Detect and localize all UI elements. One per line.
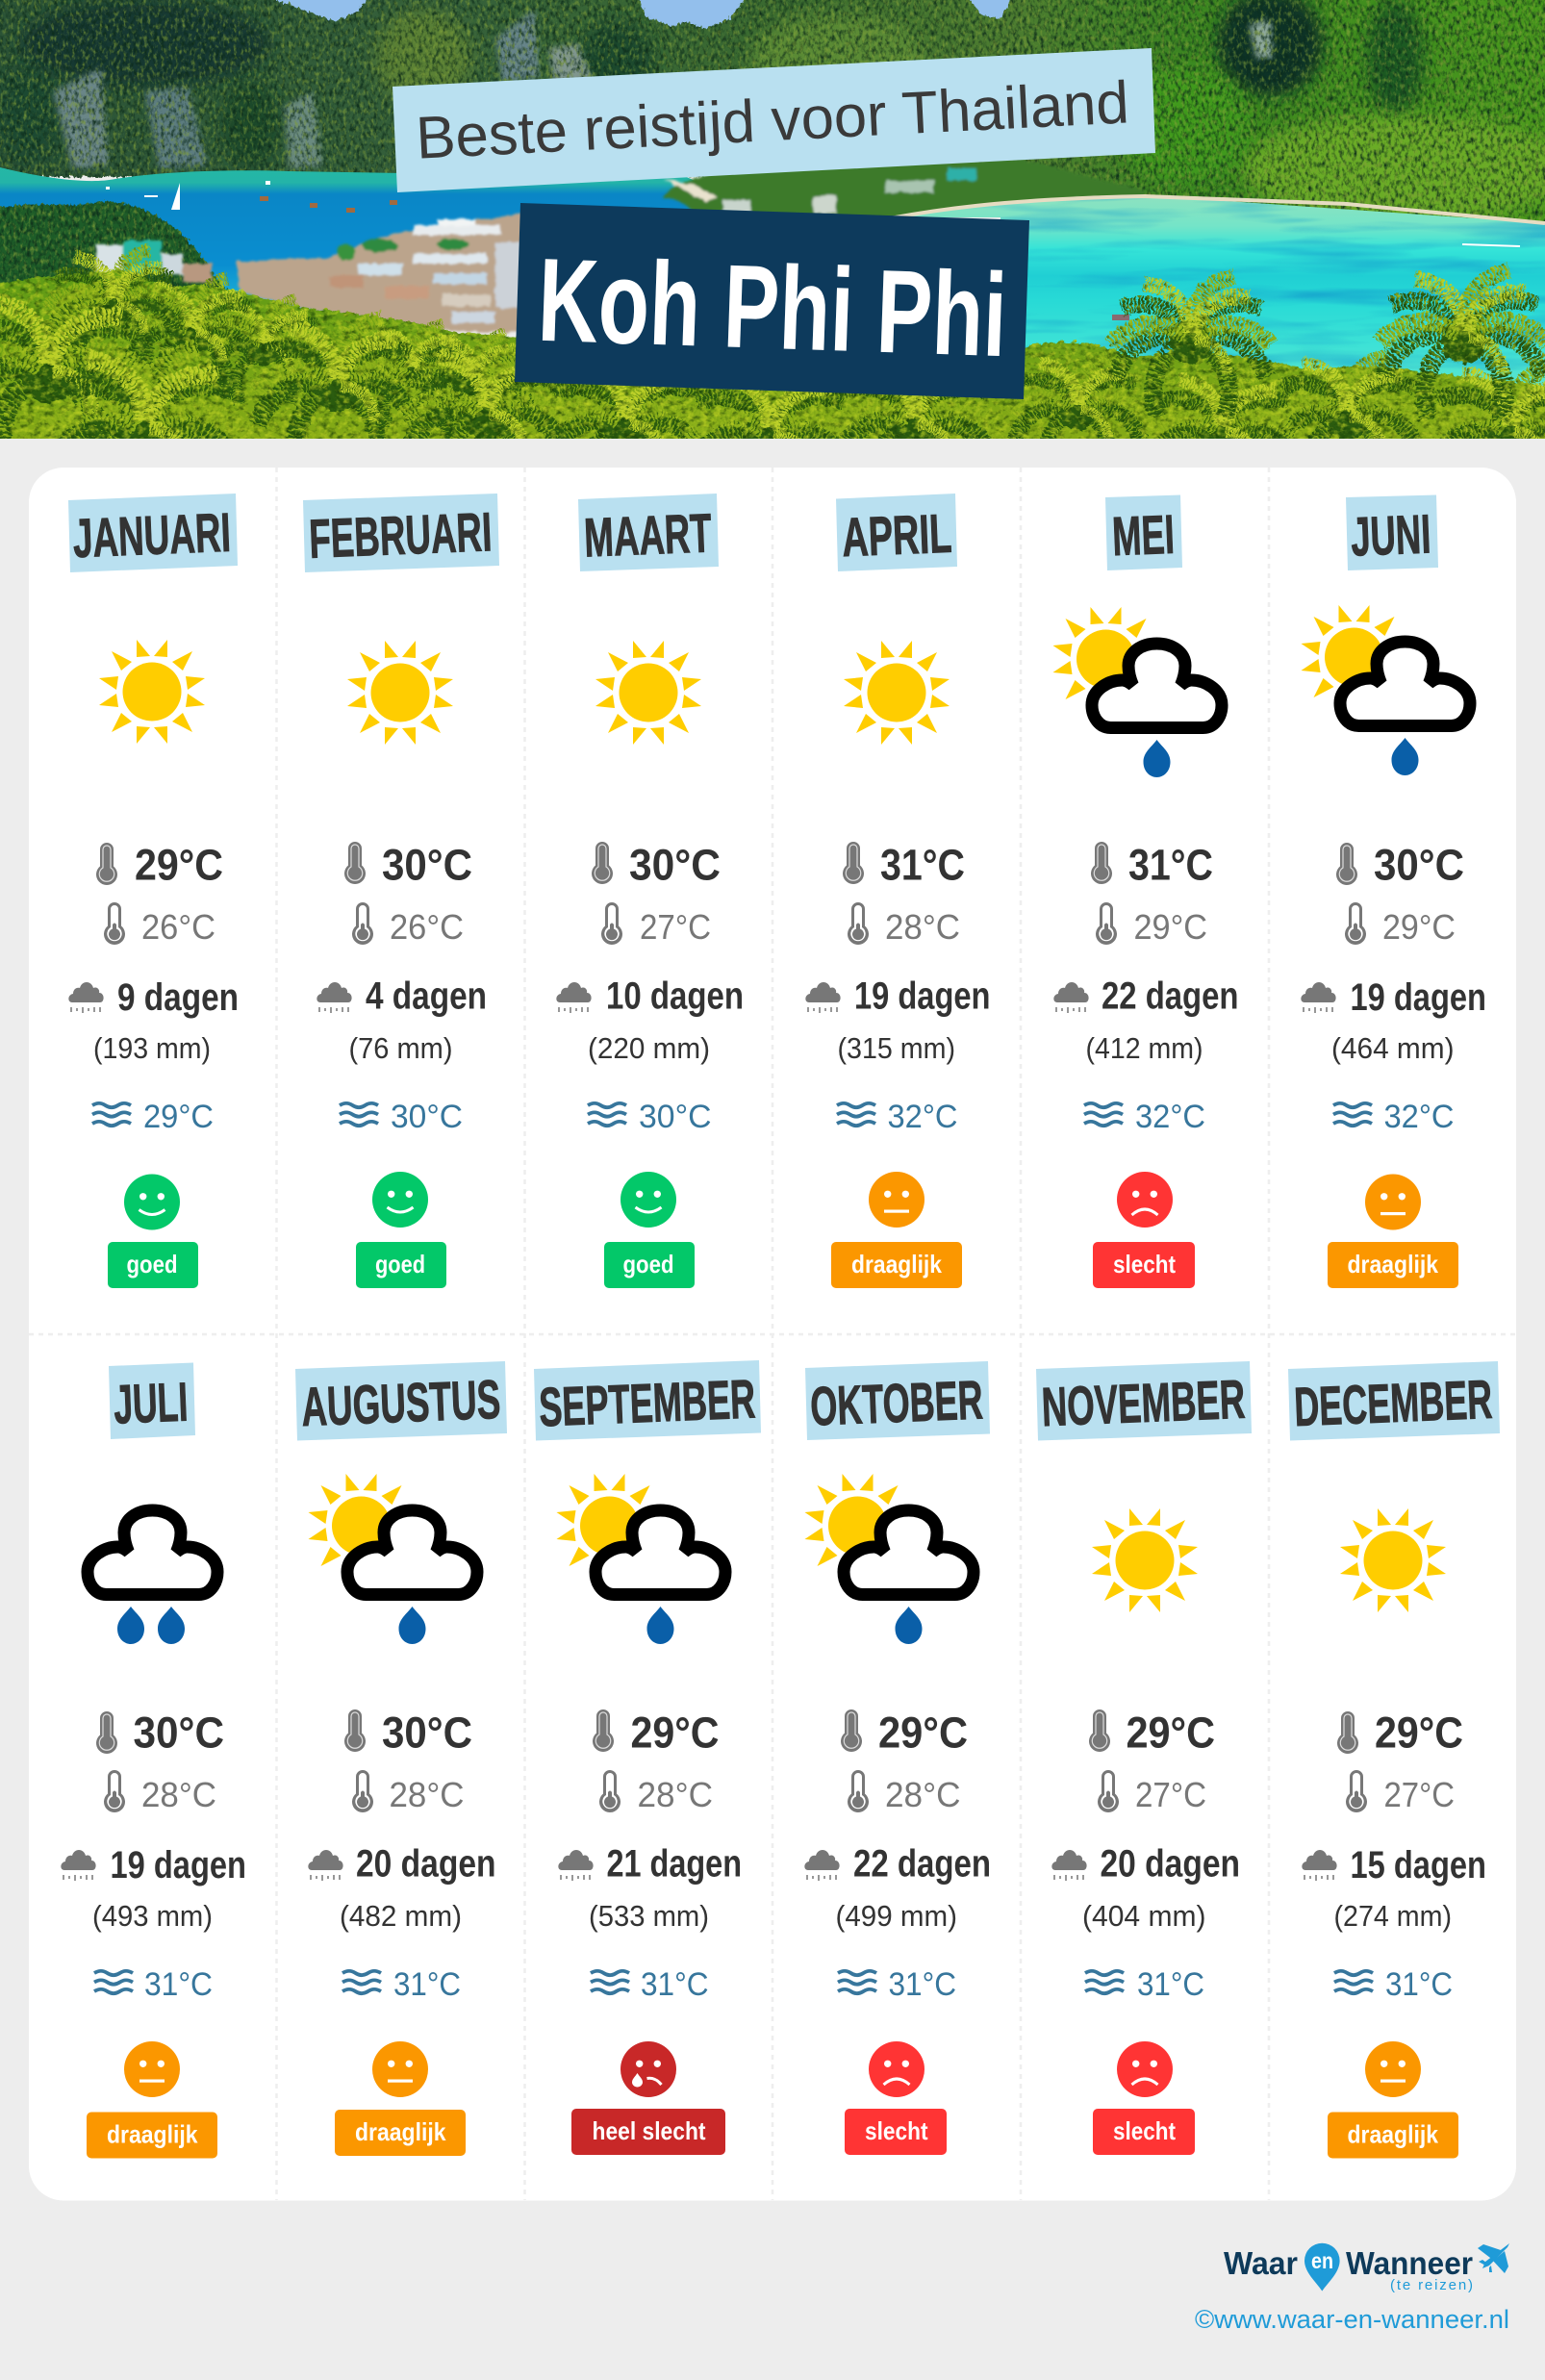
rating badge	[356, 1242, 446, 1288]
rain days: 22 dagen	[1102, 975, 1239, 1018]
icon: airplane	[1478, 2243, 1509, 2273]
rating face	[1117, 1172, 1173, 1228]
rating badge: goed	[375, 1250, 425, 1279]
rainfall: (315 mm)	[837, 1031, 955, 1065]
rainfall: (412 mm)	[1085, 1031, 1203, 1065]
max temperature	[841, 1709, 968, 1757]
hero photo: Koh Phi Phi bay	[0, 0, 1545, 439]
month label: JULI	[113, 1372, 189, 1436]
month label	[1346, 494, 1438, 570]
max temperature: 30°C	[382, 841, 472, 889]
sea temperature	[92, 1099, 214, 1135]
banner: Beste reistijd voor Thailand	[393, 48, 1155, 192]
min temperature: 28°C	[141, 1775, 216, 1814]
title: Koh Phi Phi	[515, 203, 1029, 399]
icon: sun behind cloud with one drop	[556, 1474, 725, 1644]
month label: NOVEMBER	[1041, 1369, 1246, 1438]
month: juli	[61, 1362, 246, 2159]
rain days: 19 dagen	[110, 1844, 246, 1886]
max temperature	[843, 841, 965, 889]
month: juni	[1301, 494, 1486, 1288]
rating badge	[87, 2113, 217, 2159]
sea temperature	[838, 1966, 956, 2003]
min temperature: 27°C	[1135, 1775, 1206, 1814]
rating face	[1117, 2041, 1173, 2097]
rain days	[1302, 1844, 1486, 1886]
sea temperature: 31°C	[641, 1966, 708, 2003]
month: maart	[556, 494, 744, 1288]
max temperature	[1336, 841, 1464, 889]
rainfall: (533 mm)	[589, 1899, 709, 1933]
rating badge	[108, 1242, 198, 1288]
rain days	[558, 1843, 742, 1886]
rating face	[1365, 2041, 1421, 2097]
min temperature	[1098, 1770, 1206, 1814]
rainfall: (220 mm)	[588, 1031, 710, 1065]
max temperature: 29°C	[631, 1709, 720, 1757]
sea temperature	[342, 1966, 461, 2003]
rain days: 21 dagen	[606, 1843, 742, 1886]
month: februari	[303, 494, 499, 1288]
month: november	[1036, 1361, 1252, 2155]
month label: FEBRUARI	[308, 501, 493, 570]
max temperature	[344, 841, 472, 889]
rating badge	[1328, 2113, 1458, 2159]
sea temperature: 31°C	[393, 1966, 461, 2003]
icon: sun behind cloud with one drop	[1301, 605, 1470, 775]
rain days	[317, 975, 487, 1018]
sea temperature: 31°C	[1137, 1966, 1204, 2003]
rating badge	[335, 2110, 466, 2156]
icon: sun behind cloud with one drop	[1052, 607, 1222, 777]
rating badge	[604, 1242, 695, 1288]
max temperature	[1089, 1709, 1215, 1757]
rating badge	[845, 2109, 947, 2155]
rating face	[869, 1172, 924, 1228]
sea temperature: 31°C	[1385, 1966, 1453, 2003]
month: mei	[1052, 494, 1239, 1288]
rain days: 4 dagen	[366, 975, 487, 1018]
icon: map pin	[1304, 2243, 1340, 2291]
logo: Waar en Wanneer: Waar	[1224, 2245, 1298, 2281]
month label	[578, 494, 719, 571]
icon: sun	[347, 641, 453, 745]
max temperature: 30°C	[133, 1709, 224, 1757]
min temperature: 27°C	[640, 907, 711, 947]
min temperature	[848, 902, 960, 947]
max temperature	[593, 1709, 720, 1757]
max temperature	[1091, 841, 1213, 889]
month: december	[1288, 1361, 1500, 2159]
logo: Waar en Wanneer: Wanneer	[1346, 2245, 1473, 2281]
rating face	[124, 2041, 180, 2097]
min temperature	[601, 902, 711, 947]
title: Koh Phi Phi: Koh Phi Phi	[536, 235, 1009, 382]
icon: sun behind cloud with one drop	[804, 1474, 974, 1644]
icon: sun	[1340, 1508, 1446, 1612]
rain days	[1301, 976, 1486, 1019]
panel: months card	[29, 468, 1516, 2201]
month label: OKTOBER	[809, 1369, 984, 1438]
rating face	[124, 1174, 180, 1229]
sea temperature: 31°C	[889, 1966, 956, 2003]
rating badge	[1093, 2109, 1195, 2155]
max temperature: 31°C	[1128, 841, 1213, 889]
rainfall: (193 mm)	[93, 1031, 211, 1065]
max temperature	[344, 1709, 472, 1757]
month label	[1036, 1361, 1252, 1441]
month label	[836, 494, 957, 571]
icon: sun	[595, 641, 701, 745]
max temperature: 29°C	[1126, 1709, 1215, 1757]
rating badge	[1328, 1242, 1458, 1288]
max temperature	[96, 841, 223, 889]
min temperature	[352, 902, 464, 947]
month label: MEI	[1111, 504, 1176, 568]
min temperature: 28°C	[637, 1775, 713, 1814]
min temperature: 29°C	[1133, 907, 1207, 947]
sea temperature	[588, 1099, 712, 1135]
min temperature	[848, 1770, 960, 1814]
rain days: 20 dagen	[356, 1843, 496, 1886]
month label	[295, 1361, 507, 1441]
sea temperature	[1085, 1966, 1204, 2003]
rain days: 22 dagen	[853, 1843, 991, 1886]
min temperature	[1345, 902, 1456, 947]
max temperature: 29°C	[1375, 1709, 1463, 1757]
icon: sun	[844, 641, 950, 745]
max temperature: 29°C	[878, 1709, 968, 1757]
rain days	[805, 975, 991, 1018]
sea temperature	[94, 1966, 213, 2003]
rainfall: (493 mm)	[92, 1899, 213, 1933]
rain days	[68, 976, 239, 1019]
month label: AUGUSTUS	[300, 1369, 501, 1438]
month label: JANUARI	[72, 502, 232, 570]
month label	[303, 494, 499, 572]
rain days: 19 dagen	[854, 975, 991, 1018]
sea temperature: 32°C	[887, 1099, 958, 1135]
rating badge: slecht	[865, 2116, 928, 2145]
month: oktober	[804, 1361, 991, 2155]
sea temperature	[1333, 1099, 1455, 1135]
min temperature	[104, 902, 215, 947]
icon: cloud with two drops	[88, 1510, 217, 1644]
min temperature: 26°C	[141, 907, 215, 947]
max temperature	[592, 841, 721, 889]
rainfall: (499 mm)	[835, 1899, 957, 1933]
sea temperature: 32°C	[1383, 1099, 1455, 1135]
min temperature: 29°C	[1382, 907, 1456, 947]
logo: Waar en Wanneer: (te reizen)	[1390, 2277, 1473, 2293]
rain days	[1053, 975, 1239, 1018]
rain days	[556, 975, 744, 1018]
icon: sun behind cloud with one drop	[308, 1474, 477, 1644]
rating badge: slecht	[1113, 2116, 1176, 2145]
rating badge: draaglijk	[1347, 2120, 1438, 2149]
rating badge: goed	[127, 1250, 177, 1279]
rating badge: goed	[623, 1250, 673, 1279]
min temperature: 28°C	[389, 1775, 464, 1814]
rating badge: heel slecht	[593, 2116, 706, 2145]
rating badge: draaglijk	[355, 2117, 446, 2146]
rating badge: draaglijk	[1347, 1250, 1438, 1279]
min temperature: 27°C	[1383, 1775, 1455, 1814]
min temperature: 28°C	[885, 907, 960, 947]
month: januari	[68, 494, 239, 1288]
icon: map pin: en	[1311, 2248, 1333, 2273]
sea temperature: 29°C	[143, 1099, 214, 1135]
sea temperature	[591, 1966, 708, 2003]
rating badge: draaglijk	[851, 1250, 942, 1279]
sea temperature: 30°C	[391, 1099, 463, 1135]
min temperature	[1346, 1770, 1455, 1814]
rain days: 10 dagen	[606, 975, 744, 1018]
logo: Waar en Wanneer	[1224, 2243, 1509, 2293]
month label: APRIL	[841, 503, 952, 569]
max temperature: 30°C	[382, 1709, 472, 1757]
month label: SEPTEMBER	[538, 1369, 756, 1438]
rain days	[61, 1844, 246, 1886]
month label: JUNI	[1350, 503, 1431, 569]
min temperature	[352, 1770, 464, 1814]
rating face	[372, 2041, 428, 2097]
icon: sun	[99, 640, 205, 744]
month label	[805, 1361, 990, 1440]
rainfall: (404 mm)	[1082, 1899, 1206, 1933]
rating face	[621, 1172, 676, 1228]
month: april	[805, 494, 991, 1288]
month label	[534, 1360, 761, 1441]
month label	[68, 494, 238, 572]
rain days: 19 dagen	[1351, 976, 1486, 1019]
sea temperature: 30°C	[639, 1099, 712, 1135]
min temperature: 28°C	[885, 1775, 960, 1814]
sea temperature	[340, 1099, 463, 1135]
month: augustus	[295, 1361, 507, 2156]
rainfall: (274 mm)	[1333, 1899, 1452, 1933]
min temperature	[1096, 902, 1207, 947]
rating face	[621, 2041, 676, 2097]
icon: sun	[1092, 1508, 1198, 1612]
max temperature: 30°C	[629, 841, 721, 889]
rating face	[1365, 1174, 1421, 1229]
sea temperature	[1334, 1966, 1453, 2003]
month label	[1105, 494, 1182, 570]
rating badge	[571, 2109, 725, 2155]
rating face	[372, 1172, 428, 1228]
min temperature	[599, 1770, 713, 1814]
rain days	[308, 1843, 496, 1886]
rainfall: (464 mm)	[1331, 1031, 1455, 1065]
max temperature: 31°C	[880, 841, 965, 889]
rain days: 20 dagen	[1101, 1843, 1240, 1886]
rain days: 15 dagen	[1351, 1844, 1486, 1886]
max temperature: 30°C	[1374, 841, 1464, 889]
rain days: 9 dagen	[117, 976, 239, 1019]
rainfall: (76 mm)	[348, 1031, 452, 1065]
rating badge: slecht	[1113, 1250, 1176, 1279]
website credit: ©www.waar-en-wanneer.nl	[1195, 2305, 1509, 2334]
sea temperature	[1084, 1099, 1205, 1135]
sea temperature: 31°C	[144, 1966, 213, 2003]
rating badge	[831, 1242, 962, 1288]
min temperature	[104, 1770, 216, 1814]
rating face	[869, 2041, 924, 2097]
rainfall: (482 mm)	[340, 1899, 462, 1933]
min temperature: 26°C	[390, 907, 464, 947]
banner: Beste reistijd voor Thailand: Beste reistijd voor Thailand	[415, 69, 1130, 172]
rain days	[804, 1843, 991, 1886]
sea temperature	[837, 1099, 958, 1135]
max temperature	[1337, 1709, 1463, 1757]
rating badge: draaglijk	[107, 2120, 198, 2149]
month label: MAART	[583, 502, 713, 570]
max temperature	[96, 1709, 224, 1757]
max temperature: 29°C	[135, 841, 223, 889]
rating badge	[1093, 1242, 1195, 1288]
month: september	[534, 1360, 761, 2155]
rain days	[1051, 1843, 1240, 1886]
sea temperature: 32°C	[1135, 1099, 1205, 1135]
month label	[109, 1362, 195, 1439]
